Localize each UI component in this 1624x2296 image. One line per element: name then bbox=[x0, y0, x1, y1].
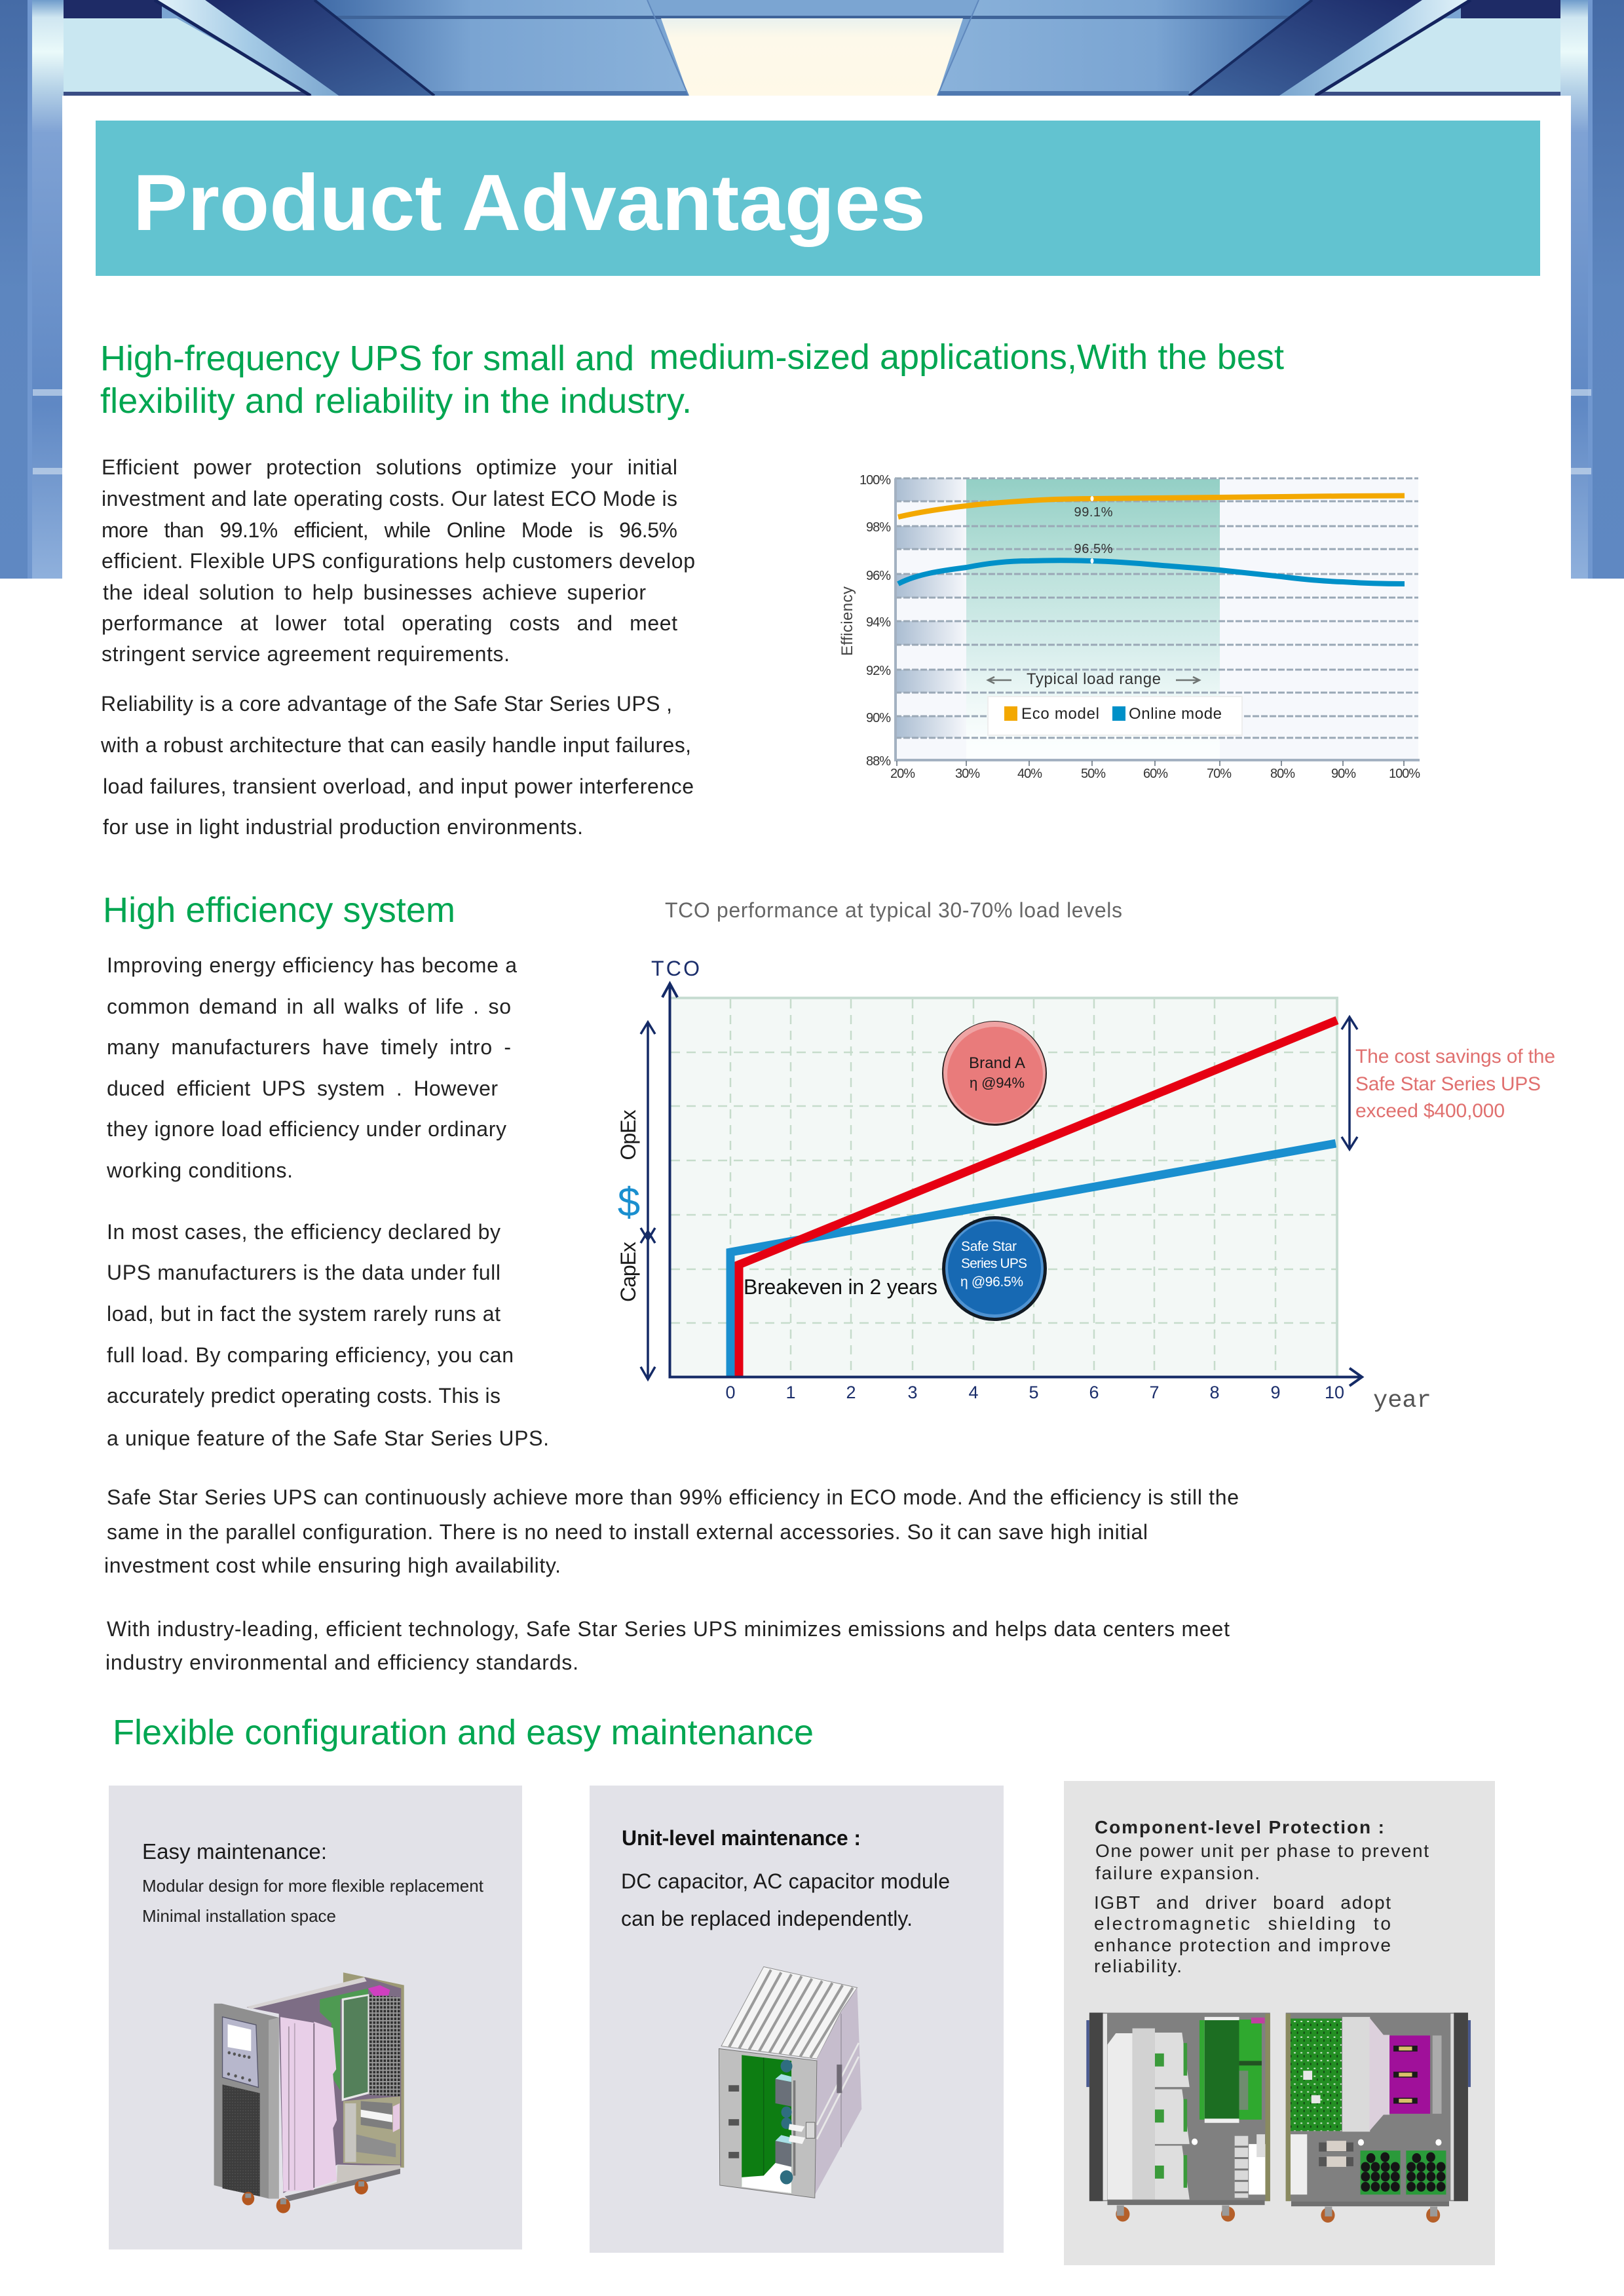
axis labels: years: 7 bbox=[1149, 1383, 1160, 1402]
text block: improving energy efficiency bbox=[106, 953, 517, 1182]
axis labels: efficiency percentages: 90% bbox=[866, 711, 891, 725]
badge: Safe Star Series UPS: Series UPS bbox=[961, 1256, 1027, 1271]
text block: declared efficiency: load, but in fact the system rarely runs at bbox=[107, 1302, 500, 1326]
axis labels: years: 6 bbox=[1089, 1383, 1099, 1402]
axis labels: years: 3 bbox=[907, 1383, 918, 1402]
panel text: IGBT and driver board: enhance protection and improve bbox=[1094, 1935, 1391, 1955]
axis labels: efficiency percentages: 98% bbox=[866, 520, 891, 535]
text block: efficient power protection: Efficient power protection solutions optimize your initial bbox=[102, 455, 677, 479]
badge: Safe Star Series UPS: Safe Star bbox=[961, 1239, 1017, 1254]
axis labels: load percentages: 60% bbox=[1143, 767, 1168, 781]
heading: high-frequency UPS: medium-sized applications,With the best bbox=[649, 337, 1284, 377]
axis labels: years: 9 bbox=[1270, 1383, 1281, 1402]
panel heading: component-level protection: Component-level Protection : bbox=[1095, 1817, 1384, 1837]
text block: declared efficiency bbox=[107, 1220, 549, 1450]
panel heading: unit-level maintenance: Unit-level maintenance : bbox=[622, 1826, 861, 1850]
axes bbox=[662, 984, 1362, 1386]
panel text: power unit per phase bbox=[1095, 1841, 1429, 1883]
value label: 99.1%: 99.1% bbox=[1074, 505, 1113, 520]
callout: cost savings: The cost savings of the bbox=[1355, 1046, 1555, 1067]
background: data-center ceiling photo bbox=[0, 0, 1624, 579]
text block: ECO mode: same in the parallel configuration. There is no need to install external accessories. So it can save high initial bbox=[107, 1520, 1148, 1544]
panel: component-level protection bbox=[1064, 1781, 1495, 2265]
text block: efficient power protection: more than 99.1% efficient, while Online Mode is 96.5% bbox=[102, 518, 677, 542]
panel text: capacitor module: DC capacitor, AC capacitor module bbox=[621, 1869, 950, 1893]
text block: ECO mode: Safe Star Series UPS can continuously achieve more than 99% efficiency in ECO mode. And the efficiency is still the bbox=[107, 1485, 1239, 1509]
axis labels: efficiency percentages: 96% bbox=[866, 569, 891, 583]
axis labels: load percentages: 100% bbox=[1389, 767, 1420, 781]
text block: improving energy efficiency: common demand in all walks of life . so bbox=[107, 995, 511, 1018]
axis labels: years: 10 bbox=[1325, 1383, 1344, 1402]
axis labels: years: 8 bbox=[1209, 1383, 1220, 1402]
axis labels: load percentages: 70% bbox=[1207, 767, 1232, 781]
text block: declared efficiency: full load. By comparing efficiency, you can bbox=[107, 1343, 514, 1367]
text block: industry-leading technology: industry environmental and efficiency standards. bbox=[105, 1651, 578, 1674]
value label: 96.5%: 96.5% bbox=[1074, 542, 1113, 556]
text block: declared efficiency: UPS manufacturers is the data under full bbox=[107, 1261, 500, 1284]
text block: improving energy efficiency: working conditions. bbox=[106, 1158, 293, 1182]
text block: efficient power protection bbox=[102, 455, 695, 666]
text block: efficient power protection: the ideal solution to help businesses achieve superior bbox=[103, 581, 646, 604]
chart: efficiency vs load bbox=[839, 473, 1420, 781]
axis labels: efficiency percentages: 92% bbox=[866, 664, 891, 678]
axis title: year: year bbox=[1373, 1387, 1431, 1415]
axis labels: load percentages: 50% bbox=[1081, 767, 1106, 781]
badge: Brand A bbox=[942, 1021, 1047, 1126]
text block: declared efficiency: a unique feature of the Safe Star Series UPS. bbox=[107, 1426, 549, 1450]
text block: declared efficiency: In most cases, the efficiency declared by bbox=[107, 1220, 500, 1244]
axis labels: efficiency percentages: 94% bbox=[866, 615, 891, 630]
axis labels: years: 4 bbox=[968, 1383, 979, 1402]
label: typical load range: Typical load range bbox=[1027, 670, 1161, 688]
axis title: TCO: TCO bbox=[651, 957, 700, 980]
heading: high-frequency UPS bbox=[100, 337, 1284, 421]
illustration: open UPS cabinet bbox=[214, 1972, 404, 2213]
panel text: IGBT and driver board: reliability. bbox=[1094, 1956, 1182, 1976]
text block: efficient power protection: efficient. Flexible UPS configurations help customers develop bbox=[102, 549, 695, 573]
axis labels: load percentages: 40% bbox=[1017, 767, 1042, 781]
axis labels: load percentages: 30% bbox=[955, 767, 980, 781]
panel text: IGBT and driver board: IGBT and driver board adopt bbox=[1094, 1892, 1391, 1913]
panel text: IGBT and driver board bbox=[1094, 1892, 1391, 1976]
badge: Safe Star Series UPS: η @96.5% bbox=[960, 1274, 1023, 1290]
text block: improving energy efficiency: Improving energy efficiency has become a bbox=[107, 953, 517, 977]
text block: efficient power protection: performance at lower total operating costs and meet bbox=[102, 611, 677, 635]
line: Brand A cost bbox=[739, 1020, 1337, 1377]
title banner bbox=[96, 121, 1540, 276]
text block: reliability: Reliability is a core advantage of the Safe Star Series UPS , bbox=[101, 692, 672, 716]
white content sheet bbox=[62, 96, 1571, 620]
axis labels: load percentages bbox=[890, 767, 1420, 781]
panel text: capacitor module: can be replaced independently. bbox=[621, 1907, 913, 1930]
axis labels: efficiency percentages bbox=[859, 473, 891, 769]
callout: cost savings: exceed $400,000 bbox=[1355, 1100, 1505, 1122]
axis labels: efficiency percentages: 100% bbox=[859, 473, 891, 488]
callout: cost savings bbox=[1355, 1046, 1555, 1122]
text block: declared efficiency: accurately predict operating costs. This is bbox=[107, 1384, 500, 1407]
text block: ECO mode bbox=[104, 1485, 1239, 1577]
panel: easy maintenance bbox=[109, 1786, 522, 2249]
legend: Eco model bbox=[1021, 705, 1099, 723]
line: online mode bbox=[898, 560, 1405, 584]
axis labels: years: 2 bbox=[846, 1383, 856, 1402]
panel text: capacitor module bbox=[621, 1869, 950, 1930]
axis labels: efficiency percentages: 88% bbox=[866, 754, 891, 769]
text block: ECO mode: investment cost while ensuring high availability. bbox=[104, 1554, 561, 1577]
axis labels: load percentages: 20% bbox=[890, 767, 915, 781]
text block: industry-leading technology bbox=[105, 1617, 1230, 1674]
text block: reliability: load failures, transient overload, and input power interference bbox=[103, 775, 694, 798]
line: eco mode bbox=[898, 495, 1405, 517]
arrows: OpEx and CapEx ranges bbox=[641, 1022, 655, 1379]
axis title: efficiency: Efficiency bbox=[839, 586, 856, 656]
axis labels: load percentages: 90% bbox=[1331, 767, 1356, 781]
badge: Brand A: Brand A bbox=[969, 1054, 1025, 1072]
chart title: TCO performance: TCO performance at typical 30-70% load levels bbox=[665, 898, 1122, 922]
axis labels: load percentages: 80% bbox=[1270, 767, 1295, 781]
chart: TCO vs year bbox=[616, 957, 1555, 1415]
panel text: power unit per phase: failure expansion. bbox=[1095, 1863, 1260, 1883]
label: OpEx: OpEx bbox=[616, 1110, 640, 1160]
text block: improving energy efficiency: they ignore load efficiency under ordinary bbox=[107, 1117, 506, 1141]
panel text: power unit per phase: One power unit per phase to prevent bbox=[1095, 1841, 1429, 1861]
title: Product Advantages bbox=[133, 158, 926, 247]
legend: Online mode bbox=[1129, 705, 1222, 723]
axis labels: years: 1 bbox=[785, 1383, 796, 1402]
text block: efficient power protection: investment and late operating costs. Our latest ECO Mode is bbox=[102, 487, 677, 510]
heading: high efficiency system: High efficiency system bbox=[103, 890, 455, 930]
axis labels: years: 0 bbox=[725, 1383, 736, 1402]
text block: reliability bbox=[100, 692, 694, 839]
illustration: UPS cabinet internals bbox=[1086, 2013, 1471, 2223]
axis labels: years: 5 bbox=[1029, 1383, 1039, 1402]
label: CapEx: CapEx bbox=[616, 1242, 640, 1302]
panel text: modular design bbox=[142, 1876, 484, 1926]
arrow: cost savings range bbox=[1342, 1017, 1357, 1149]
text block: industry-leading technology: With industry-leading, efficient technology, Safe Star Series UPS minimizes emissions and helps data centers meet bbox=[107, 1617, 1230, 1641]
panel: unit-level maintenance bbox=[590, 1786, 1004, 2253]
text block: improving energy efficiency: duced efficient UPS system . However bbox=[107, 1077, 498, 1100]
text block: reliability: with a robust architecture that can easily handle input failures, bbox=[100, 733, 691, 757]
axis labels: years bbox=[725, 1383, 1344, 1402]
badge: Brand A: η @94% bbox=[970, 1075, 1025, 1091]
badge: Safe Star Series UPS bbox=[942, 1216, 1047, 1321]
heading: flexible configuration: Flexible configuration and easy maintenance bbox=[113, 1713, 814, 1752]
heading: high-frequency UPS: flexibility and reliability in the industry. bbox=[100, 381, 692, 421]
text block: reliability: for use in light industrial production environments. bbox=[103, 815, 583, 839]
callout: cost savings: Safe Star Series UPS bbox=[1355, 1073, 1541, 1095]
line: Safe Star Series UPS cost bbox=[730, 1143, 1336, 1376]
label: typical load range bbox=[988, 670, 1199, 688]
text block: efficient power protection: stringent service agreement requirements. bbox=[102, 642, 510, 666]
panel text: modular design: Modular design for more flexible replacement bbox=[142, 1876, 484, 1896]
heading: high-frequency UPS: High-frequency UPS for small and bbox=[100, 339, 634, 378]
label: dollar sign: $ bbox=[618, 1180, 640, 1225]
text block: improving energy efficiency: many manufacturers have timely intro - bbox=[107, 1035, 511, 1059]
illustration: power unit module bbox=[719, 1966, 861, 2198]
panel heading: easy maintenance: Easy maintenance: bbox=[142, 1839, 327, 1864]
legend bbox=[988, 697, 1242, 735]
label: breakeven: Breakeven in 2 years bbox=[744, 1275, 937, 1299]
panel text: IGBT and driver board: electromagnetic shielding to bbox=[1094, 1913, 1391, 1934]
panel text: modular design: Minimal installation space bbox=[142, 1906, 336, 1926]
